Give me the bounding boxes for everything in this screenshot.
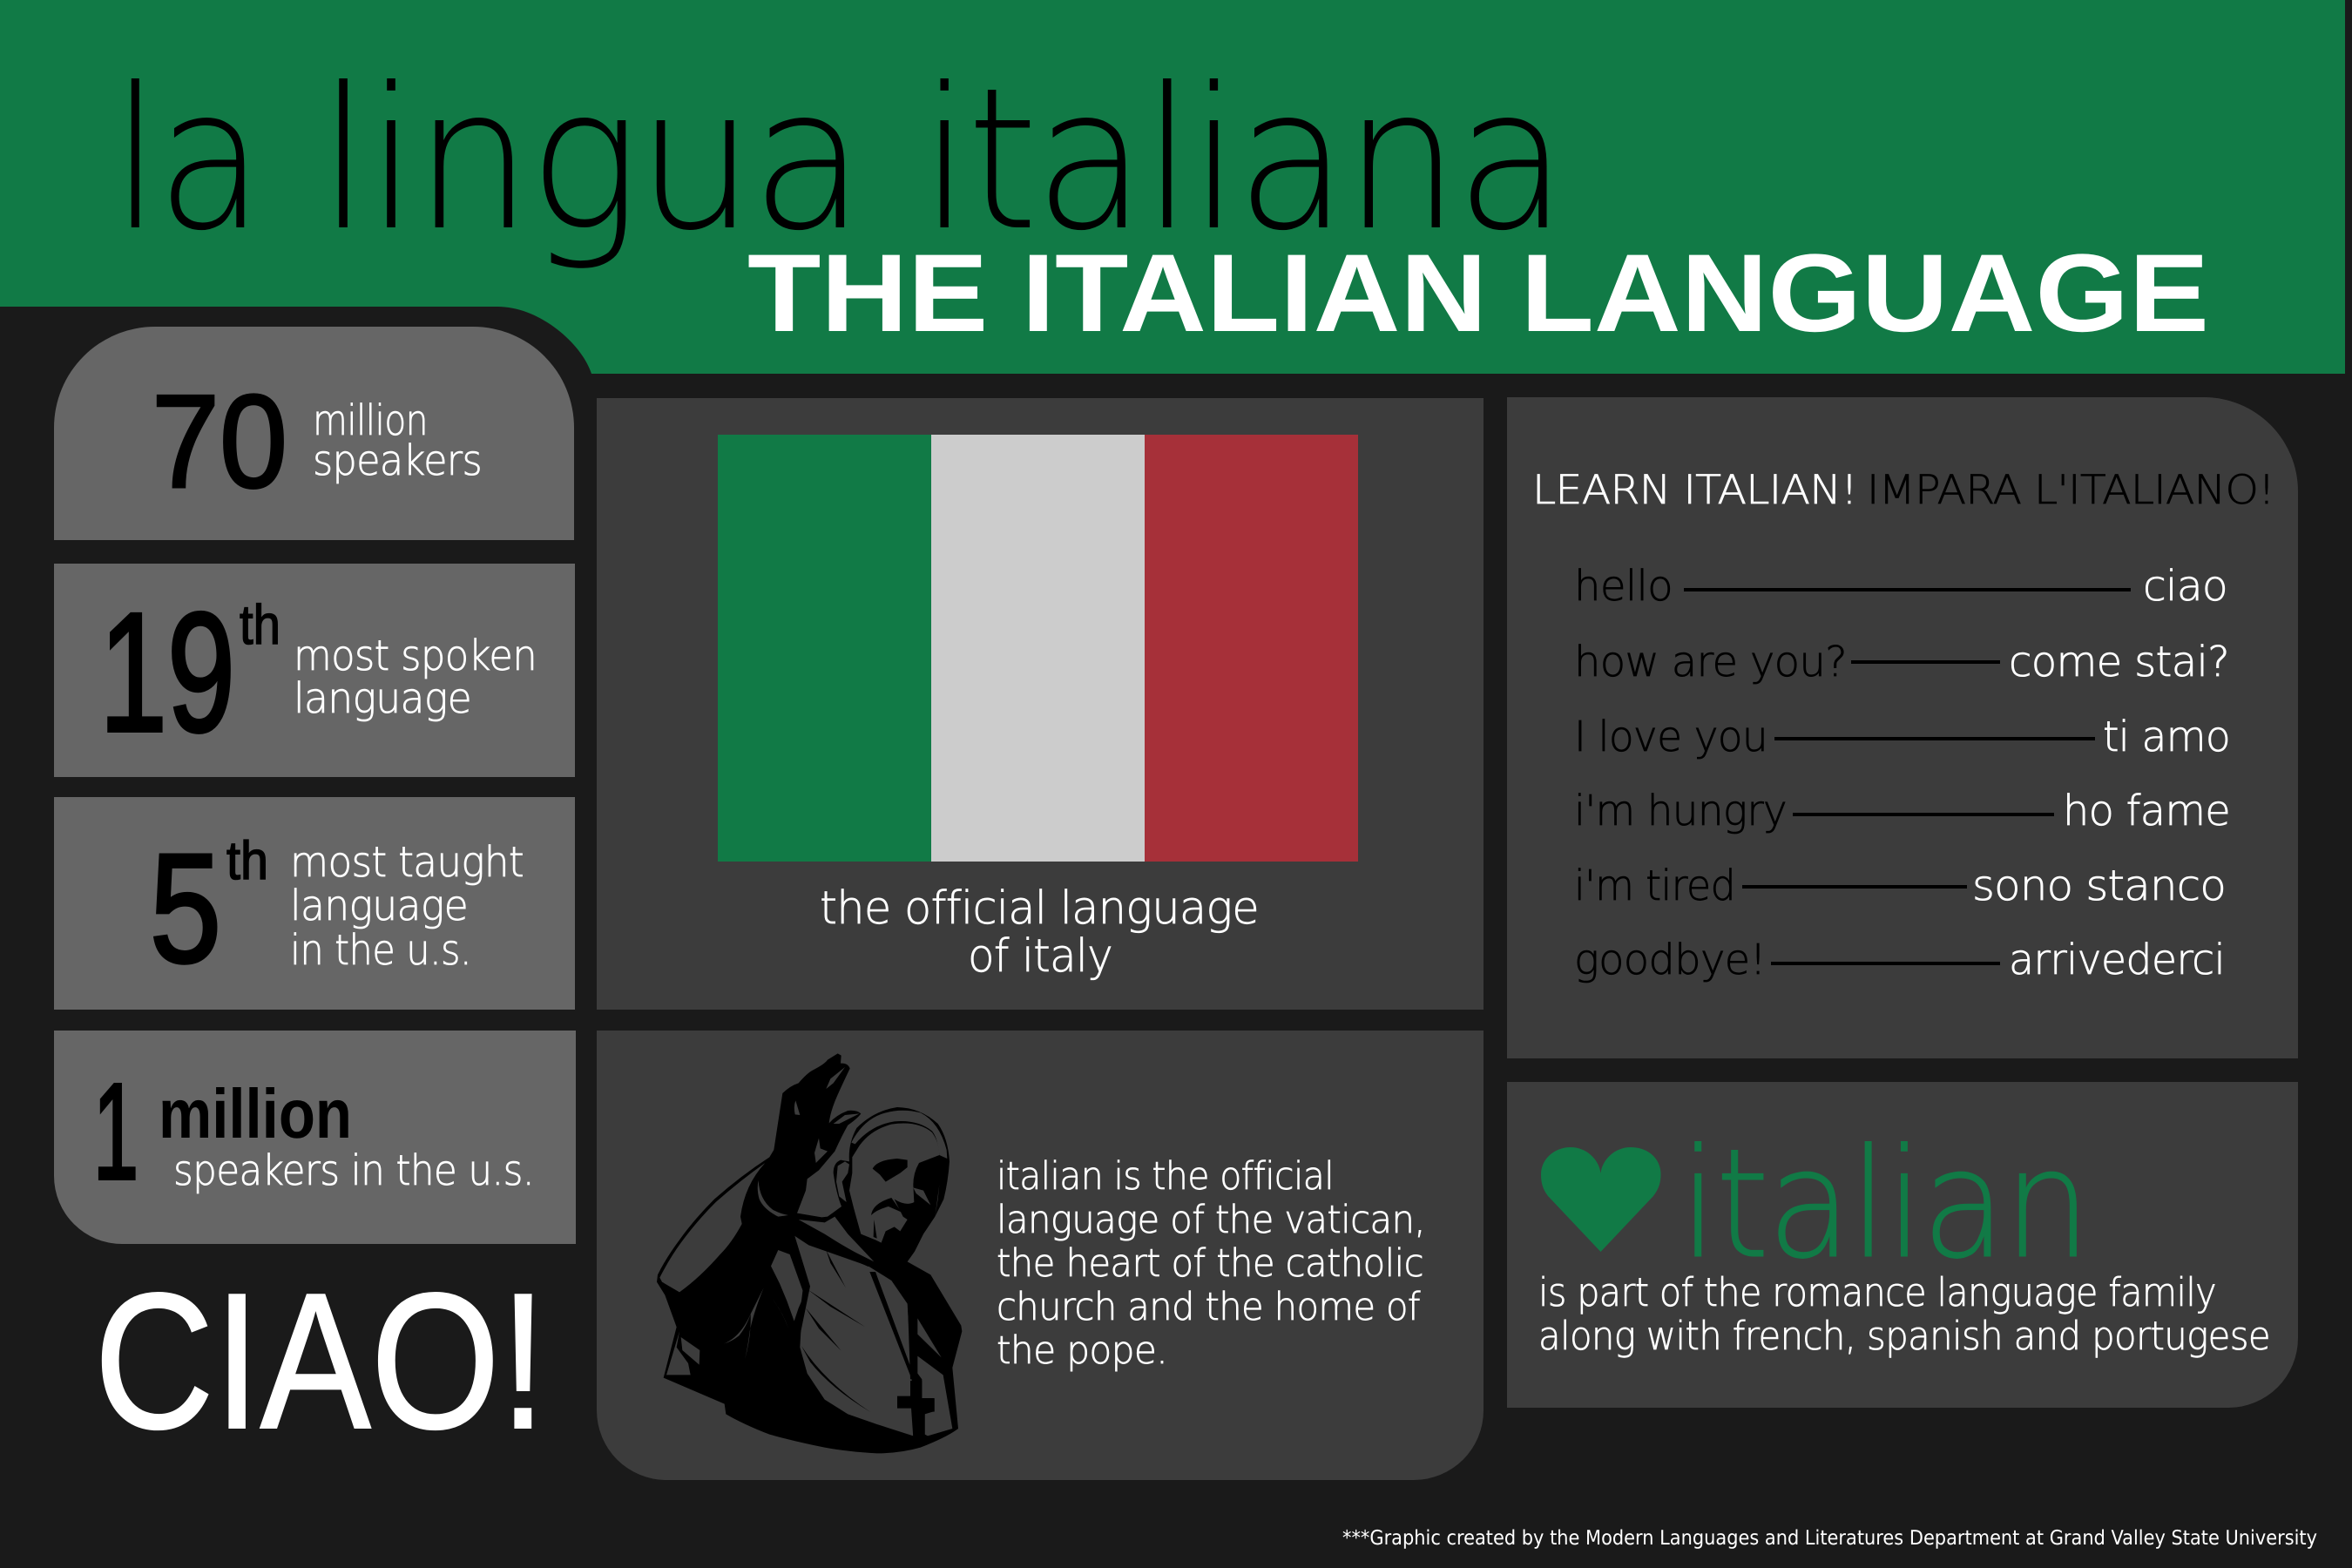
vatican text: italian is the official [997, 1154, 1334, 1199]
phrase: i'm tired / sono stanco [1574, 862, 2226, 910]
romance family text [1538, 1269, 2270, 1359]
heading: learn italian [1532, 466, 2274, 513]
stat label: most taught language in the u.s.: most taught [290, 838, 524, 887]
phrase: goodbye / arrivederci: goodbye! [1574, 936, 1766, 984]
phrase: goodbye / arrivederci [1574, 936, 2225, 984]
subtitle: the italian language: THE ITALIAN LANGUAGE [747, 231, 2209, 355]
phrase: i love you / ti amo: I love you [1574, 713, 1767, 761]
stat number: 19th: 19 [99, 578, 235, 767]
greeting: CIAO!: CIAO! [94, 1254, 546, 1470]
panel: 1 million speakers in the u.s. [54, 1031, 576, 1244]
panel: learn italian phrases [1507, 397, 2298, 1058]
vatican text: the heart of the catholic [997, 1241, 1423, 1286]
romance family text: is part of the romance language family [1538, 1269, 2216, 1315]
stat label: most spoken language: language [294, 674, 471, 723]
stat label: most taught language in the u.s.: language [290, 882, 468, 930]
vatican text [997, 1154, 1425, 1373]
title: la lingua italiana: lingua [318, 46, 862, 274]
panel: the vatican [597, 1031, 1484, 1480]
flag caption [820, 882, 1259, 983]
title: la lingua italiana: italiana [920, 46, 1564, 274]
flag caption: of italy [968, 930, 1112, 983]
phrase: how are you / come stai: how are you? [1574, 638, 1847, 686]
heading: learn italian: IMPARA L'ITALIANO! [1867, 466, 2274, 513]
panel: 19th most spoken language [54, 564, 575, 777]
phrase: how are you / come stai: come stai? [2009, 638, 2229, 686]
stat number: 5th: th [226, 831, 268, 891]
phrase: how are you / come stai [1574, 638, 2229, 686]
flag caption: the official language [820, 882, 1259, 935]
phrase: hello / ciao: ciao [2143, 562, 2227, 611]
icon: italian flag [718, 435, 1358, 862]
stat label: million speakers: speakers [313, 436, 482, 485]
heading: learn italian: LEARN ITALIAN! [1532, 466, 1857, 513]
stat label: speakers in the u.s.: speakers in the u.s. [173, 1146, 534, 1195]
stat label: most spoken language [294, 632, 537, 723]
phrase: i'm tired / sono stanco: sono stanco [1972, 862, 2226, 910]
title: la lingua italiana: la [112, 46, 260, 274]
stat label: million: million [159, 1075, 352, 1152]
icon: heart [1541, 1147, 1660, 1252]
word: italian: italian [1680, 1116, 2089, 1292]
phrase: i'm hungry / ho fame [1574, 787, 2230, 835]
vatican text: language of the vatican, [997, 1198, 1425, 1242]
phrase: i love you / ti amo [1574, 713, 2230, 761]
vatican text: church and the home of [997, 1285, 1421, 1329]
panel: flag of italy [597, 398, 1484, 1010]
stat label: million speakers [313, 396, 482, 485]
phrase: i'm hungry / ho fame: i'm hungry [1574, 787, 1787, 835]
stat number: 5th: 5 [150, 821, 221, 995]
stat label: most spoken language: most spoken [294, 632, 537, 680]
phrase: hello / ciao: hello [1574, 562, 1673, 611]
stat number: 1: 1 [93, 1056, 139, 1208]
stat number: 19th: th [240, 593, 280, 656]
header band with title [0, 0, 2345, 374]
phrase: hello / ciao [1574, 562, 2227, 611]
vatican text: the pope. [997, 1328, 1167, 1373]
stat number: 70: 70 [152, 368, 287, 516]
stat label: most taught language in the u.s. [290, 838, 524, 975]
title: la lingua italiana [112, 46, 1564, 274]
panel: 5th most taught language [54, 797, 575, 1010]
phrase: i love you / ti amo: ti amo [2103, 713, 2230, 761]
phrase: i'm tired / sono stanco: i'm tired [1574, 862, 1735, 910]
stat label: million speakers: million [313, 396, 428, 445]
icon: pope waving [657, 1053, 962, 1453]
panel: 70 million speakers [54, 327, 574, 540]
stat label: most taught language in the u.s.: in the u.s. [290, 926, 471, 975]
romance family text: along with french, spanish and portugese [1538, 1313, 2270, 1359]
panel: romance language family [1507, 1082, 2298, 1408]
phrase: i'm hungry / ho fame: ho fame [2063, 787, 2230, 835]
phrase: goodbye / arrivederci: arrivederci [2009, 936, 2225, 984]
